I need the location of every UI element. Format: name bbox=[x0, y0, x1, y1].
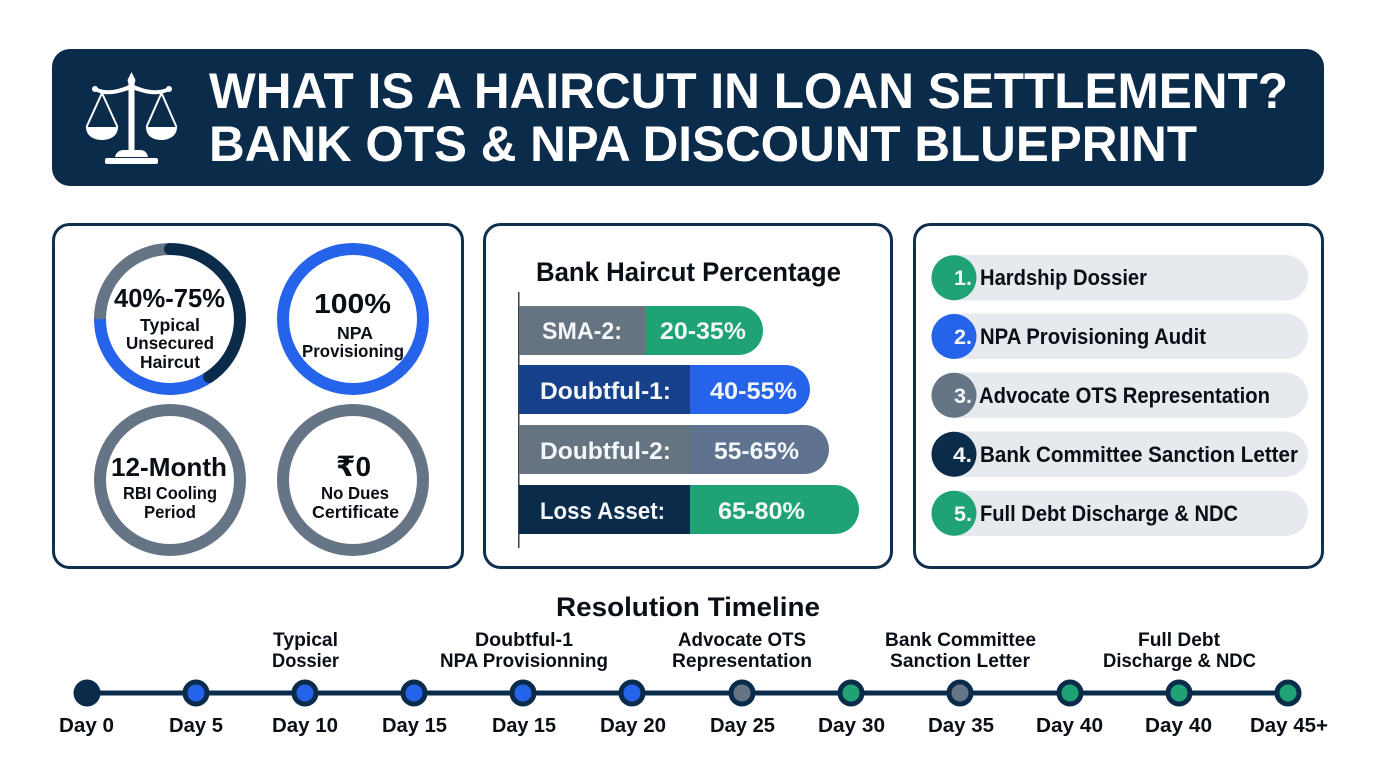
milestone label: full debt discharge and NDC: Discharge & NDC bbox=[1103, 651, 1256, 672]
day labels: Day 15 bbox=[492, 714, 556, 737]
bar: Doubtful-2 bbox=[519, 425, 829, 474]
step 5: 5. bbox=[954, 503, 972, 526]
bar: Loss Asset: 65-80% bbox=[718, 498, 805, 525]
day labels: Day 45+ bbox=[1250, 714, 1328, 737]
day labels: Day 25 bbox=[710, 714, 775, 737]
bar: SMA-2: SMA-2: bbox=[542, 318, 622, 345]
step 4: 4. bbox=[953, 444, 972, 467]
metric: 100% NPA provisioning: NPA bbox=[337, 323, 373, 343]
milestone label: bank committee sanction letter bbox=[885, 630, 1036, 672]
step 1 bbox=[932, 255, 1308, 300]
step 2: NPA Provisioning Audit bbox=[980, 324, 1207, 349]
title line 2: BANK OTS & NPA DISCOUNT BLUEPRINT bbox=[209, 116, 1197, 172]
milestone label: advocate OTS representation: Advocate OTS bbox=[678, 630, 806, 651]
metric: zero no dues certificate bbox=[283, 410, 423, 550]
milestone label: typical dossier bbox=[272, 630, 340, 672]
day labels: Day 15 bbox=[382, 714, 447, 737]
milestone label: bank committee sanction letter: Sanction Letter bbox=[890, 651, 1031, 672]
day labels: Day 0 bbox=[59, 714, 114, 737]
milestone label: full debt discharge and NDC bbox=[1103, 630, 1256, 672]
milestone label: doubtful-1 NPA provisioning bbox=[440, 630, 608, 672]
metric: zero no dues certificate: No Dues bbox=[321, 483, 389, 503]
day labels bbox=[59, 714, 1328, 737]
panel: five settlement steps bbox=[914, 224, 1322, 568]
metric: 40%-75% typical unsecured haircut: 40%-75% bbox=[114, 283, 225, 313]
metric: 12-month RBI cooling period bbox=[100, 410, 240, 550]
milestone label: bank committee sanction letter: Bank Committee bbox=[885, 630, 1036, 651]
bar: Doubtful-2: 55-65% bbox=[714, 438, 799, 465]
day labels: Day 35 bbox=[928, 714, 994, 737]
day labels: Day 40 bbox=[1145, 714, 1212, 737]
icon: scales of justice bbox=[86, 72, 177, 164]
metric: 12-month RBI cooling period: Period bbox=[144, 502, 196, 522]
step 3: 3. bbox=[954, 385, 972, 408]
milestone label: typical dossier: Dossier bbox=[272, 651, 340, 672]
bar: Doubtful-1: 40-55% bbox=[710, 378, 797, 405]
metric: 40%-75% typical unsecured haircut bbox=[100, 249, 240, 389]
milestone label: typical dossier: Typical bbox=[273, 630, 338, 651]
panel: key metrics bbox=[54, 224, 462, 568]
day labels: Day 10 bbox=[272, 714, 338, 737]
bar: Doubtful-1 bbox=[519, 365, 810, 414]
metric: 40%-75% typical unsecured haircut: Unsecured bbox=[126, 333, 214, 353]
milestone label: doubtful-1 NPA provisioning: Doubtful-1 bbox=[475, 630, 573, 651]
metric: 12-month RBI cooling period: RBI Cooling bbox=[123, 483, 217, 503]
metric: zero no dues certificate: ₹0 bbox=[336, 451, 371, 482]
bar: Loss Asset: Loss Asset: bbox=[540, 498, 665, 525]
step 2 bbox=[932, 314, 1308, 359]
chart heading: Bank Haircut Percentage bbox=[536, 257, 841, 287]
metric: 100% NPA provisioning bbox=[283, 249, 423, 389]
bar: Doubtful-2: Doubtful-2: bbox=[540, 438, 671, 465]
metric: zero no dues certificate: Certificate bbox=[312, 502, 399, 522]
day labels: Day 5 bbox=[169, 714, 223, 737]
step 5: Full Debt Discharge & NDC bbox=[980, 501, 1238, 526]
step 5 bbox=[932, 490, 1308, 536]
milestone label: advocate OTS representation: Representation bbox=[672, 651, 812, 672]
day labels: Day 30 bbox=[818, 714, 885, 737]
step 1: 1. bbox=[954, 267, 972, 290]
day labels: Day 40 bbox=[1036, 714, 1103, 737]
metric: 100% NPA provisioning: 100% bbox=[314, 288, 391, 319]
bar: Loss Asset bbox=[519, 485, 859, 534]
chart axis bbox=[518, 292, 520, 548]
step 4: Bank Committee Sanction Letter bbox=[980, 442, 1298, 467]
metric: 12-month RBI cooling period: 12-Month bbox=[111, 452, 227, 482]
header banner bbox=[52, 49, 1324, 186]
title line 1: WHAT IS A HAIRCUT IN LOAN SETTLEMENT? bbox=[209, 63, 1288, 119]
milestone label: advocate OTS representation bbox=[672, 630, 812, 672]
metric: 100% NPA provisioning: Provisioning bbox=[302, 341, 404, 361]
timeline track and nodes bbox=[74, 680, 1299, 706]
step 1: Hardship Dossier bbox=[980, 265, 1147, 290]
bar: Doubtful-1: Doubtful-1: bbox=[540, 378, 671, 405]
step 3: Advocate OTS Representation bbox=[979, 383, 1270, 408]
step 2: 2. bbox=[954, 326, 972, 349]
panel: bank haircut percentage chart bbox=[484, 224, 892, 568]
timeline section bbox=[59, 592, 1328, 737]
step 3 bbox=[932, 372, 1308, 418]
milestone label: doubtful-1 NPA provisioning: NPA Provisionning bbox=[440, 651, 608, 672]
bar: SMA-2 bbox=[519, 306, 763, 355]
timeline heading: Resolution Timeline bbox=[556, 592, 820, 622]
milestone label: full debt discharge and NDC: Full Debt bbox=[1138, 630, 1221, 651]
step 4 bbox=[932, 432, 1308, 477]
bar: SMA-2: 20-35% bbox=[660, 318, 746, 345]
metric: 40%-75% typical unsecured haircut: Haircut bbox=[140, 352, 200, 372]
day labels: Day 20 bbox=[600, 714, 666, 737]
metric: 40%-75% typical unsecured haircut: Typical bbox=[140, 315, 200, 335]
